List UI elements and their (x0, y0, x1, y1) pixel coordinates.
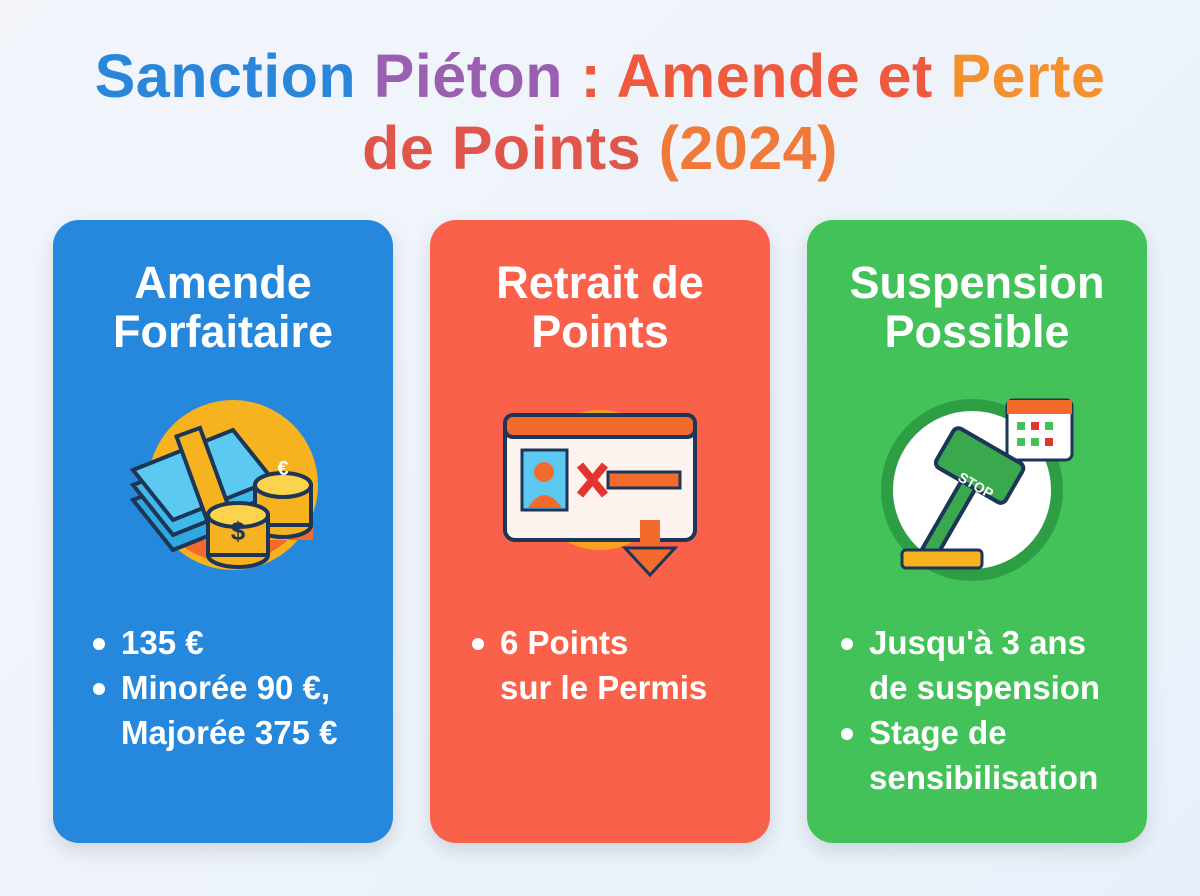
bullets: suspension (841, 624, 1100, 796)
panel: points (430, 220, 770, 843)
heading: amende: Amende (134, 257, 312, 308)
icon: gavel (881, 398, 1074, 581)
heading: points (496, 257, 704, 357)
bullets: suspension: Stage de (869, 714, 1007, 751)
heading: suspension: Suspension (849, 257, 1105, 308)
icon: money (130, 400, 318, 570)
bullets: points (472, 624, 707, 706)
bullets: amende: Majorée 375 € (121, 714, 337, 751)
heading: points: Points (531, 306, 669, 357)
icon: gavel: STOP (956, 469, 996, 502)
heading: amende: Forfaitaire (113, 306, 333, 357)
bullets: suspension: Jusqu'à 3 ans (869, 624, 1086, 661)
icon: license (503, 410, 697, 578)
title (95, 42, 1105, 182)
bullets: points: sur le Permis (500, 669, 707, 706)
bullets: amende: 135 € (121, 624, 204, 661)
bullets: amende: Minorée 90 €, (121, 669, 330, 706)
panel: suspension (807, 220, 1147, 843)
icon: money: $ (231, 516, 246, 546)
heading: amende (113, 257, 333, 357)
heading: suspension (849, 257, 1105, 357)
title: de Points (2024) (362, 114, 838, 182)
title: Sanction Piéton : Amende et Perte (95, 42, 1105, 110)
heading: points: Retrait de (496, 257, 704, 308)
bullets: points: 6 Points (500, 624, 628, 661)
bullets: amende (93, 624, 337, 751)
panel: amende (53, 220, 393, 843)
icon: money: € (277, 458, 289, 480)
bullets: suspension: de suspension (869, 669, 1100, 706)
bullets: suspension: sensibilisation (869, 759, 1098, 796)
heading: suspension: Possible (884, 306, 1070, 357)
